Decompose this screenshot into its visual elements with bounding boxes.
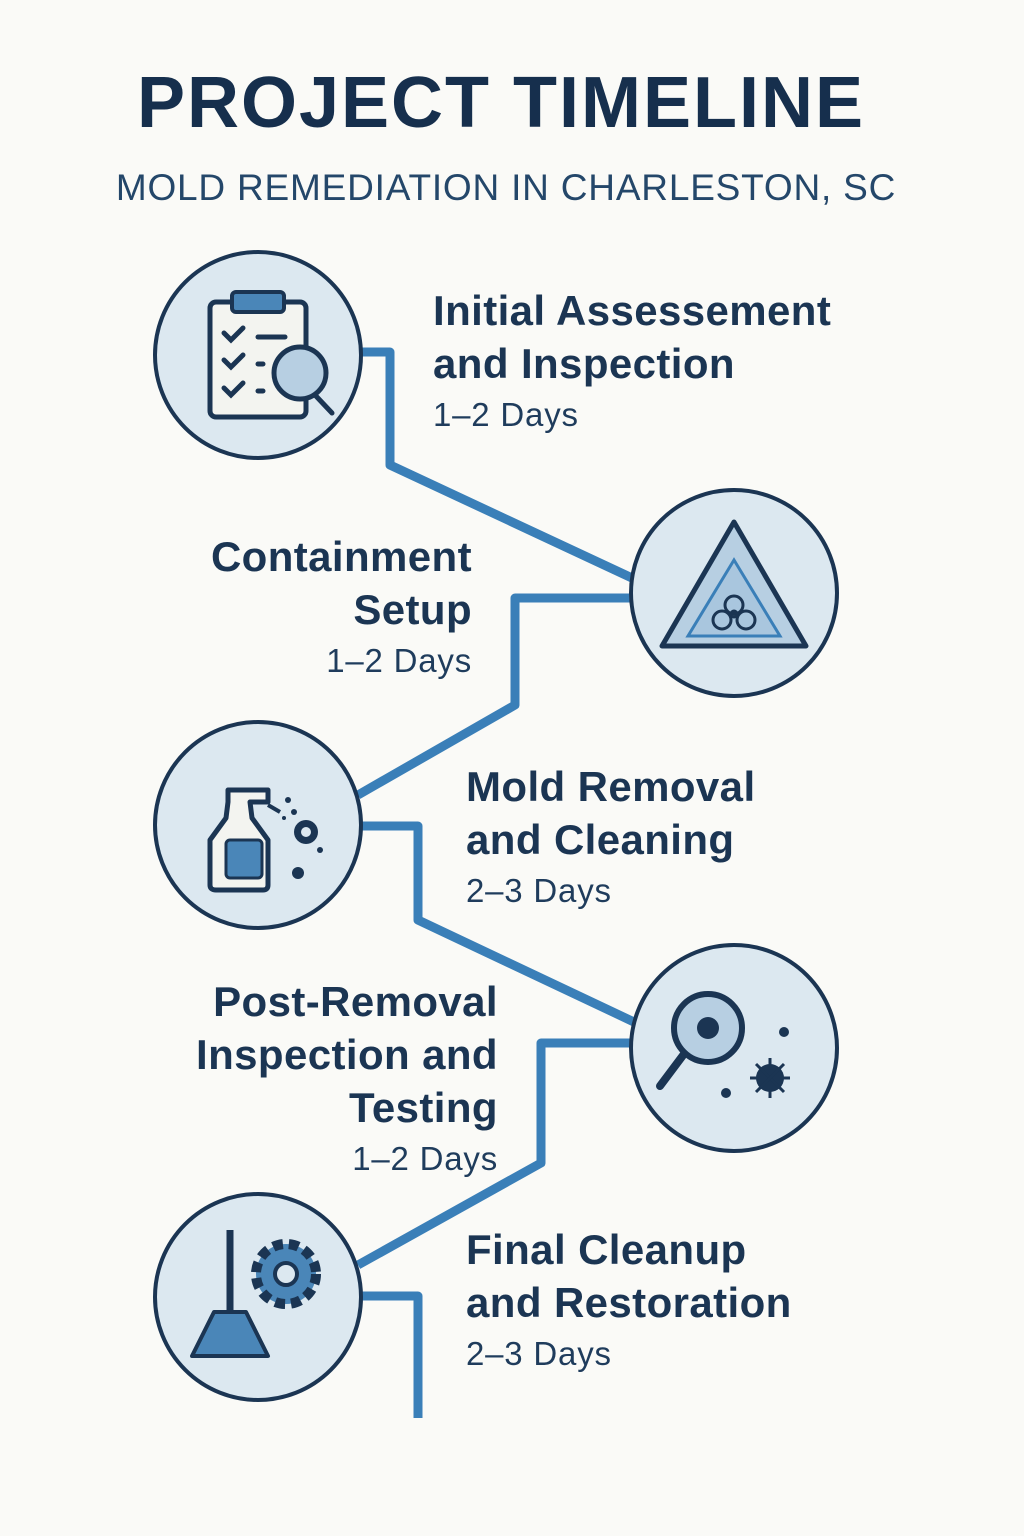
step 4 text: Testing: [349, 1084, 498, 1131]
title: PROJECT TIMELINE: [137, 63, 865, 143]
icon: spray bottle: [155, 722, 361, 928]
step 4 text: Post-Removal: [213, 978, 498, 1025]
step 3 text: and Cleaning: [466, 816, 734, 863]
connector line: [358, 352, 634, 1418]
step 1 text: [433, 287, 831, 433]
subtitle: MOLD REMEDIATION IN CHARLESTON, SC: [116, 167, 896, 208]
step 2 text: [211, 533, 472, 679]
icon: biohazard: [631, 490, 837, 696]
icon: broom and gear: [155, 1194, 361, 1400]
step 5 text: [466, 1226, 792, 1372]
step 5 text: Final Cleanup: [466, 1226, 747, 1273]
step 2 text: 1–2 Days: [326, 642, 472, 679]
step 5 text: 2–3 Days: [466, 1335, 612, 1372]
step 4 text: Inspection and: [196, 1031, 498, 1078]
step 2 text: Containment: [211, 533, 472, 580]
icon: clipboard: [155, 252, 361, 458]
step 1 text: and Inspection: [433, 340, 735, 387]
step 3 text: Mold Removal: [466, 763, 756, 810]
step 3 text: [466, 763, 756, 909]
step 1 text: Initial Assessement: [433, 287, 831, 334]
step 2 text: Setup: [353, 586, 472, 633]
step 4 text: [196, 978, 498, 1177]
step 5 text: and Restoration: [466, 1279, 792, 1326]
step 4 text: 1–2 Days: [352, 1140, 498, 1177]
step 1 text: 1–2 Days: [433, 396, 579, 433]
step 3 text: 2–3 Days: [466, 872, 612, 909]
icon: magnifier with germ: [631, 945, 837, 1151]
